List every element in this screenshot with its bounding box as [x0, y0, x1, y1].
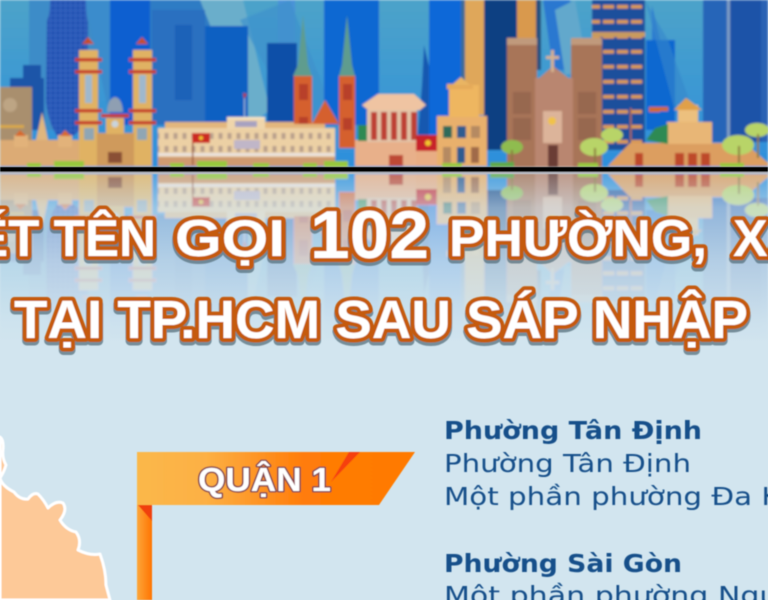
title shadow: 102 — [310, 200, 429, 276]
title shadow: PHƯỜNG, — [449, 213, 707, 271]
title — [0, 197, 768, 353]
post fold — [138, 505, 152, 521]
waterline — [0, 167, 768, 174]
banner ribbon — [137, 452, 415, 505]
skyline water reflection — [0, 172, 768, 350]
banner red accent — [331, 452, 360, 482]
title shadow: GỌI — [175, 213, 285, 271]
ward heading: Sài Gòn: Phường Sài Gòn — [444, 549, 682, 578]
map of Ho Chi Minh City — [0, 437, 110, 600]
ward list — [444, 416, 768, 600]
ward source: Đa Kao: Một phần phường Đa Kao — [444, 482, 768, 511]
district banner: Quận 1 — [137, 452, 415, 600]
title line 2: TẠI TP.HCM SAU SÁP NHẬP — [14, 289, 748, 350]
ward heading: Tân Định: Phường Tân Định — [444, 416, 702, 445]
title line 1 — [0, 197, 768, 273]
banner label: QUẬN 1 — [198, 461, 331, 498]
ward source: Tân Định: Phường Tân Định — [444, 449, 691, 478]
title shadow: TẠI TP.HCM SAU SÁP NHẬP — [14, 292, 748, 353]
banner side post — [137, 505, 152, 600]
title line 1: 102 — [310, 197, 429, 273]
title shadow — [0, 200, 768, 353]
title line 1: PHƯỜNG, — [449, 210, 707, 268]
title line 1: GỌI — [175, 210, 285, 268]
city skyline illustration — [0, 0, 768, 167]
